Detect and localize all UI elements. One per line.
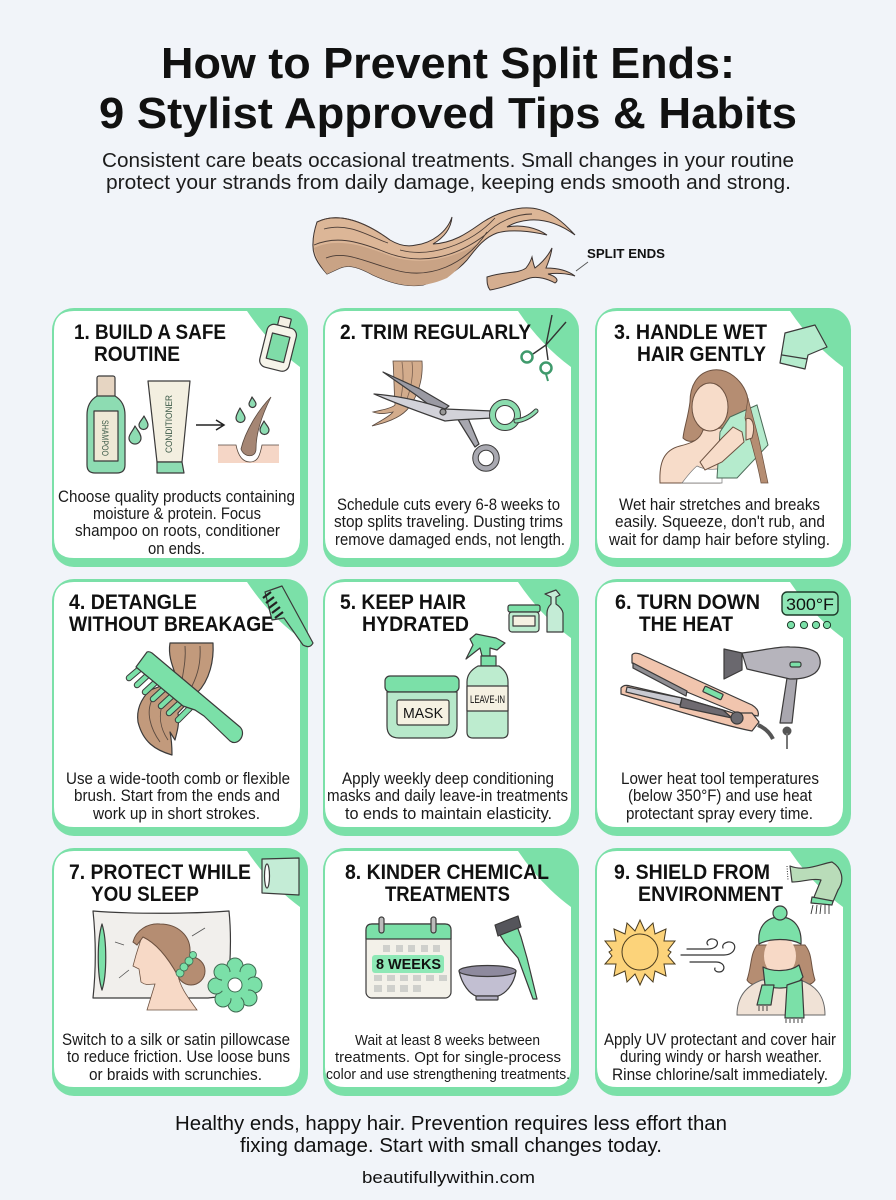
icon: small towel	[780, 325, 827, 369]
body text: to reduce friction. Use loose buns	[67, 1048, 290, 1066]
heading: 7. PROTECT WHILE	[69, 861, 251, 884]
body text: Rinse chlorine/salt immediately.	[612, 1066, 828, 1084]
body text	[608, 496, 830, 549]
icon: wind	[681, 939, 735, 972]
body text: stop splits traveling. Dusting trims	[334, 513, 563, 531]
panel: 1 build a safe routine	[52, 308, 308, 567]
body text: (below 350°F) and use heat	[628, 787, 812, 805]
heading	[340, 591, 469, 636]
icon: small scissors	[522, 315, 566, 381]
title: 9 Stylist Approved Tips & Habits	[99, 89, 797, 138]
closing text: Healthy ends, happy hair. Prevention requires less effort than	[175, 1113, 727, 1135]
icon: hair bundle	[372, 361, 422, 426]
closing text: fixing damage. Start with small changes today.	[240, 1135, 662, 1157]
icon: temperature display: 300°F	[786, 595, 834, 614]
card background	[52, 848, 308, 1096]
card background	[323, 308, 579, 567]
body text: Switch to a silk or satin pillowcase	[62, 1031, 290, 1049]
body text: protectant spray every time.	[626, 805, 813, 823]
body text: Wait at least 8 weeks between	[355, 1032, 540, 1049]
heading: HAIR GENTLY	[637, 343, 766, 366]
body text: Use a wide-tooth comb or flexible	[66, 770, 290, 788]
icon: scrunchie	[208, 958, 262, 1012]
heading: 8. KINDER CHEMICAL	[345, 861, 549, 884]
illustration: hair strand with split ends	[313, 208, 665, 290]
icon: wide-tooth comb	[129, 652, 243, 743]
heading: ENVIRONMENT	[638, 883, 783, 906]
icon: droplets	[129, 416, 148, 444]
leader line	[576, 262, 588, 271]
panel: 4 detangle without breakage	[52, 579, 313, 836]
body text: moisture & protein. Focus	[93, 505, 261, 523]
body text	[62, 1031, 290, 1084]
panel: 6 turn down the heat	[595, 579, 851, 836]
heading: 5. KEEP HAIR	[340, 591, 466, 614]
body text: brush. Start from the ends and	[74, 787, 280, 805]
icon: mask jar	[385, 676, 459, 738]
body text: treatments. Opt for single-process	[335, 1049, 561, 1066]
body text: on ends.	[148, 540, 205, 558]
icon: calendar 8 weeks	[366, 917, 451, 998]
panel: 7 protect while you sleep	[52, 848, 308, 1096]
heading	[615, 591, 760, 636]
icon: tint brush	[495, 916, 537, 999]
body text: or braids with scrunchies.	[89, 1066, 262, 1084]
body text	[327, 770, 568, 823]
icon: leave-in spray: LEAVE-IN	[470, 694, 505, 706]
icon: sun	[605, 920, 675, 985]
heading	[69, 861, 251, 906]
card background	[323, 579, 579, 836]
body text	[58, 488, 295, 558]
icon: shampoo bottle: SHAMPOO	[100, 420, 110, 456]
body text: Apply weekly deep conditioning	[342, 770, 554, 788]
strand lines	[314, 214, 532, 273]
heading: 6. TURN DOWN	[615, 591, 760, 614]
card background	[595, 308, 851, 567]
illustration: woman in hat and scarf	[737, 906, 825, 1023]
illustration: woman drying hair	[660, 370, 768, 483]
icon: leave-in spray	[466, 634, 508, 738]
panel: 5 keep hair hydrated	[323, 579, 579, 836]
card background	[323, 848, 579, 1096]
intro text	[102, 149, 794, 194]
heading: YOU SLEEP	[91, 883, 199, 906]
heading: WITHOUT BREAKAGE	[69, 613, 274, 636]
body text: during windy or harsh weather.	[620, 1048, 822, 1066]
heading: 4. DETANGLE	[69, 591, 197, 614]
panel: 9 shield from environment	[595, 848, 851, 1096]
heading	[69, 591, 274, 636]
icon: shampoo bottle	[87, 376, 125, 473]
body text: wait for damp hair before styling.	[608, 531, 830, 549]
icon: temperature display	[782, 592, 838, 629]
body text: Apply UV protectant and cover hair	[604, 1031, 836, 1049]
website credit: beautifullywithin.com	[362, 1168, 535, 1187]
body text: color and use strengthening treatments.	[326, 1066, 570, 1083]
icon: calendar 8 weeks: 8 WEEKS	[376, 956, 441, 973]
body text	[66, 770, 290, 823]
body text: easily. Squeeze, don't rub, and	[615, 513, 825, 531]
body text	[621, 770, 819, 823]
body text: work up in short strokes.	[92, 805, 260, 823]
body text: Choose quality products containing	[58, 488, 295, 506]
card background	[595, 579, 851, 836]
card background	[52, 308, 308, 567]
icon: small jar and spray	[508, 590, 563, 632]
card background	[52, 579, 308, 836]
heading: 9. SHIELD FROM	[614, 861, 770, 884]
body text	[604, 1031, 836, 1084]
heading	[614, 861, 783, 906]
body text: shampoo on roots, conditioner	[75, 522, 280, 540]
heading: THE HEAT	[639, 613, 733, 636]
card background	[595, 848, 851, 1096]
icon: tint bowl	[459, 966, 516, 1000]
body text: Lower heat tool temperatures	[621, 770, 819, 788]
illustration: sleeping head on pillow	[93, 911, 230, 1010]
icon: small bottle	[258, 314, 300, 373]
heading	[614, 321, 767, 366]
body text: remove damaged ends, not length.	[335, 531, 565, 549]
icon: small pillowcase	[262, 858, 299, 895]
heading: HYDRATED	[362, 613, 469, 636]
heading: 3. HANDLE WET	[614, 321, 767, 344]
icon: conditioner tube: CONDITIONER	[164, 395, 174, 453]
heading: TREATMENTS	[385, 883, 510, 906]
icon: mask jar: MASK	[403, 705, 443, 722]
panel: 8 kinder chemical treatments	[323, 848, 579, 1096]
body text: Schedule cuts every 6-8 weeks to	[337, 496, 560, 514]
icon: large scissors	[374, 372, 536, 468]
heading: 1. BUILD A SAFE	[74, 321, 226, 344]
icon: conditioner tube	[148, 381, 190, 473]
body text	[334, 496, 565, 549]
icon: hair strand	[138, 643, 213, 755]
title: How to Prevent Split Ends:	[161, 39, 735, 88]
icon: hair dryer	[724, 647, 820, 749]
icon: small comb	[263, 586, 313, 647]
closing text	[175, 1113, 727, 1157]
heading: 2. TRIM REGULARLY	[340, 321, 531, 344]
icon: small scarf	[787, 862, 842, 914]
label: split ends: SPLIT ENDS	[587, 246, 665, 261]
panel: 3 handle wet hair gently	[595, 308, 851, 567]
body text: Wet hair stretches and breaks	[619, 496, 820, 514]
intro text: Consistent care beats occasional treatments. Small changes in your routine	[102, 149, 794, 172]
heading	[74, 321, 226, 366]
icon: flat iron	[621, 653, 773, 739]
shading	[314, 243, 478, 286]
title	[99, 39, 797, 138]
heading	[345, 861, 549, 906]
heading: ROUTINE	[94, 343, 180, 366]
icon: main hair strand	[313, 208, 575, 286]
body text: masks and daily leave-in treatments	[327, 787, 568, 805]
body text: to ends to maintain elasticity.	[345, 805, 552, 823]
intro text: protect your strands from daily damage, keeping ends smooth and strong.	[106, 171, 791, 194]
panel: 2 trim regularly	[323, 308, 579, 567]
arrow	[196, 420, 224, 430]
body text	[326, 1032, 570, 1083]
icon: hair follicle	[218, 397, 279, 463]
